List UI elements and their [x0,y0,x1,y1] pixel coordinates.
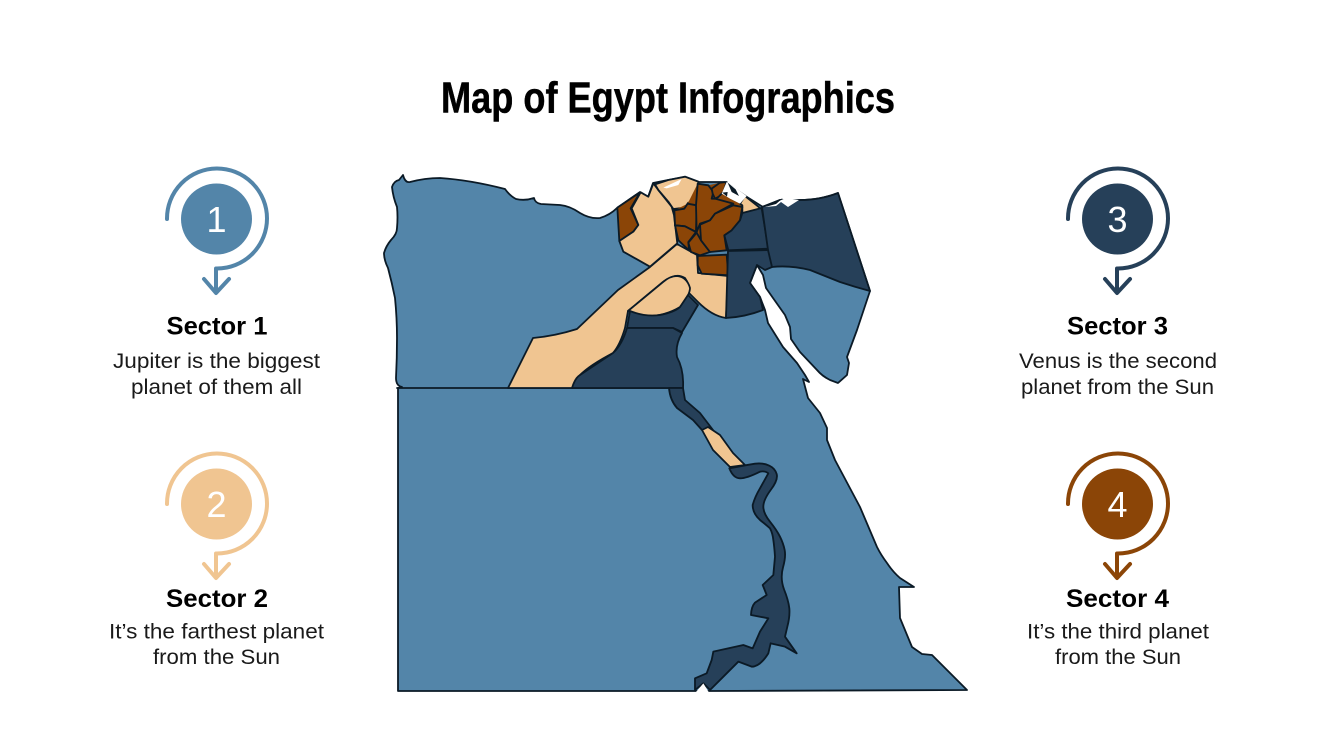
text: sector 2 description: It’s the farthest planet [109,620,324,644]
icon: sector 3 number with arrow [1068,168,1168,293]
title: Map of Egypt Infographics [441,74,895,122]
icon: sector 4 number with arrow: 4 [1107,484,1128,525]
region: brown Menoufia [675,225,696,250]
region: west delta governorates [617,177,698,267]
region: brown Gharbia [674,204,697,232]
text: sector 1 description: planet of them all [131,376,302,399]
icon: sector 3 number with arrow: 3 [1107,199,1128,240]
region: dark Nile north [669,388,713,430]
text: sector 3 description: planet from the Sun [1021,376,1214,399]
heading: sector 3: Sector 3 [1067,312,1168,340]
sector 1 block [113,168,320,399]
region: dark north Sinai [762,193,870,291]
region: lagoon [722,182,747,204]
line: north-south division [397,387,683,389]
text: sector 2 description: from the Sun [153,646,280,669]
region: tan Nile [702,427,745,467]
region: brown Qalyubia [688,233,710,255]
icon: sector 1 number with arrow [167,168,267,293]
text: sector 4 description: from the Sun [1055,646,1181,669]
region: north lagoon [663,179,682,188]
region: dark upper valley [627,295,698,332]
icon: sector 1 number with arrow: 1 [206,199,227,240]
icon: sector 2 number with arrow [167,453,267,578]
region: dark Suez [726,250,772,318]
text: sector 3 description: Venus is the second [1019,350,1217,373]
sector 4 block [1027,453,1209,669]
region: dark middle valley [572,328,683,388]
region: eastern governorates [726,193,870,318]
region: brown Cairo [698,255,728,275]
map of Egypt [384,175,967,692]
text: sector 4 description: It’s the third planet [1027,620,1209,644]
region: brown Sharqia [700,205,742,252]
icon: sector 2 number with arrow: 2 [206,484,227,525]
region: brown Dakahlia [696,184,733,232]
region: brown Damietta [712,182,727,199]
region: country base [384,175,967,691]
region: dark Nile south [695,463,797,692]
region: Beheira tan [619,183,677,267]
region: north tan [655,177,698,209]
text: sector 1 description [113,350,320,399]
text: sector 2 description [109,620,324,669]
heading: sector 1: Sector 1 [166,312,268,340]
region: central delta governorates [674,182,768,275]
text: sector 4 description [1027,620,1209,669]
heading: sector 4: Sector 4 [1066,585,1169,613]
heading: sector 2: Sector 2 [166,585,268,613]
text: sector 3 description [1019,350,1217,399]
region: dark Port Said [724,208,768,250]
region: tan right [740,196,761,214]
text: sector 1 description: Jupiter is the biggest [113,350,320,373]
region: brown backing [674,183,742,255]
sector 2 block [109,453,324,669]
sector 3 block [1019,168,1217,399]
icon: sector 4 number with arrow [1068,453,1168,578]
region: tan lens [628,276,690,316]
region: corridor tan [508,244,728,388]
region: Sinai lagoon [765,198,799,207]
region: west brown [617,192,640,241]
